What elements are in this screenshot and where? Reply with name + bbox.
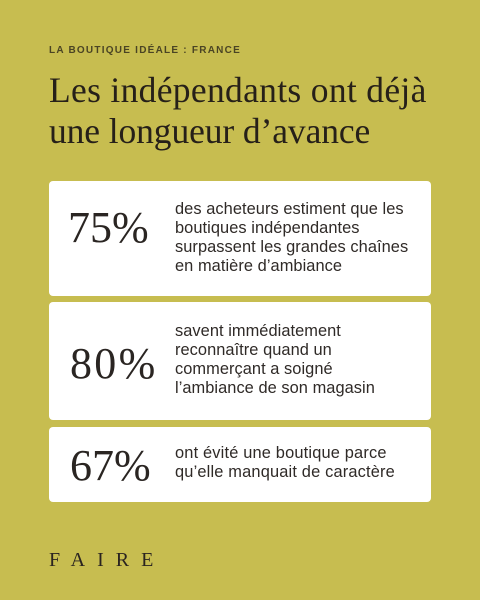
stat number 80%: 80% bbox=[70, 339, 158, 388]
stat description 80%: l’ambiance de son magasin bbox=[175, 379, 375, 397]
stat number 67%: 67% bbox=[70, 441, 151, 490]
stat description 67%: qu’elle manquait de caractère bbox=[175, 463, 395, 481]
eyebrow label: LA BOUTIQUE IDÉALE : FRANCE bbox=[49, 45, 241, 56]
panel: 67% stat bbox=[49, 427, 431, 502]
stat description 80%: commerçant a soigné bbox=[175, 360, 333, 378]
stat description 80%: savent immédiatement bbox=[175, 322, 341, 340]
stat description 75% bbox=[175, 200, 408, 275]
panel: 75% stat bbox=[49, 181, 431, 296]
stat description 80% bbox=[175, 322, 375, 397]
stat number 75%: 75% bbox=[68, 203, 149, 252]
logo: FAIRE: FAIRE bbox=[49, 549, 165, 571]
title: Les indépendants ont déjà bbox=[49, 70, 427, 110]
title bbox=[49, 70, 427, 151]
stat description 75%: surpassent les grandes chaînes bbox=[175, 238, 408, 256]
stat description 75%: boutiques indépendantes bbox=[175, 219, 360, 237]
stat description 75%: en matière d’ambiance bbox=[175, 257, 342, 275]
stat description 67% bbox=[175, 444, 395, 481]
panel: 80% stat bbox=[49, 302, 431, 420]
stat description 67%: ont évité une boutique parce bbox=[175, 444, 387, 462]
stat description 80%: reconnaître quand un bbox=[175, 341, 332, 359]
title: une longueur d’avance bbox=[49, 111, 370, 151]
stat description 75%: des acheteurs estiment que les bbox=[175, 200, 404, 218]
